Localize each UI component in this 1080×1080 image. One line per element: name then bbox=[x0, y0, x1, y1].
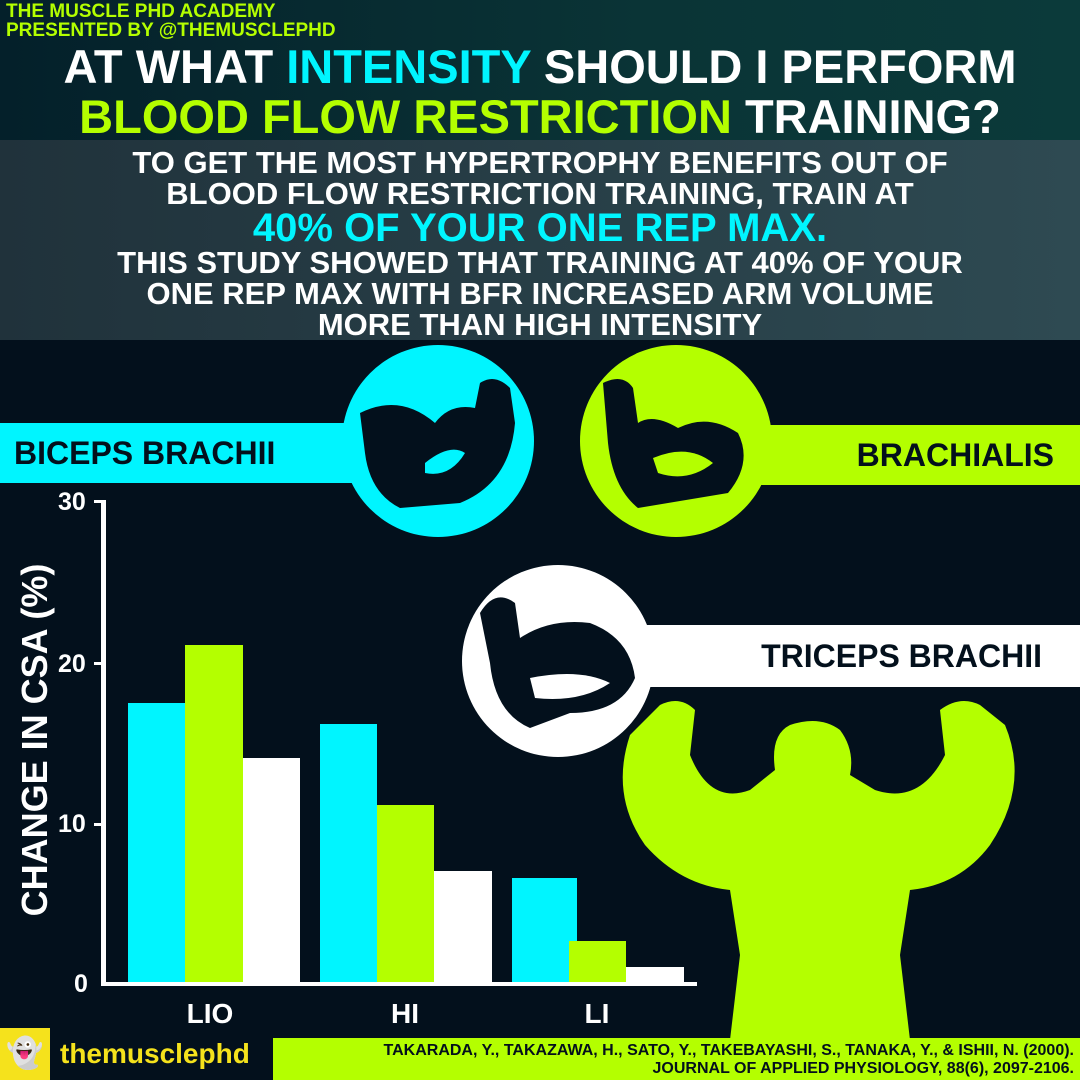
summary panel bbox=[0, 140, 1080, 340]
bar chart: LI bbox=[585, 998, 609, 1029]
summary panel: MORE THAN HIGH INTENSITY bbox=[318, 307, 762, 342]
summary panel: 40% OF YOUR ONE REP MAX. bbox=[253, 206, 827, 250]
summary panel: BLOOD FLOW RESTRICTION TRAINING, TRAIN AT bbox=[166, 176, 914, 211]
label: brachialis bbox=[700, 425, 1080, 485]
bars HI bbox=[320, 724, 377, 982]
snapchat handle bbox=[0, 1028, 250, 1080]
bars LIO bbox=[128, 703, 185, 982]
y axis title: CHANGE IN CSA (%) bbox=[14, 564, 55, 916]
title bbox=[63, 40, 1017, 143]
label: triceps brachii: TRICEPS BRACHII bbox=[761, 638, 1042, 674]
summary panel: THIS STUDY SHOWED THAT TRAINING AT 40% OF YOUR bbox=[117, 245, 963, 280]
title: BLOOD FLOW RESTRICTION TRAINING? bbox=[79, 90, 1001, 143]
header background bbox=[0, 0, 1080, 140]
snapchat handle: themusclephd bbox=[60, 1038, 250, 1069]
bar chart: 20 bbox=[58, 650, 86, 678]
icon: snapchat ghost: 👻 bbox=[6, 1037, 44, 1070]
bar chart: 10 bbox=[58, 810, 86, 838]
label: biceps brachii: BICEPS BRACHII bbox=[14, 435, 275, 471]
title: AT WHAT INTENSITY SHOULD I PERFORM bbox=[63, 40, 1017, 93]
label: triceps brachii bbox=[640, 625, 1080, 687]
icon: bodybuilder silhouette bbox=[622, 701, 1015, 1038]
bar chart bbox=[14, 488, 697, 1029]
x labels: LIO bbox=[187, 998, 233, 1029]
brand text: PRESENTED BY @THEMUSCLEPHD bbox=[6, 20, 336, 41]
citation bbox=[273, 1038, 1080, 1080]
brand text bbox=[6, 1, 336, 41]
bar chart: HI bbox=[391, 998, 419, 1029]
citation: JOURNAL OF APPLIED PHYSIOLOGY, 88(6), 2097-2106. bbox=[653, 1060, 1074, 1077]
brand text: THE MUSCLE PHD ACADEMY bbox=[6, 1, 276, 22]
label: biceps brachii bbox=[0, 423, 370, 483]
y tick labels: 30 bbox=[58, 488, 86, 516]
icon: triceps arm bbox=[462, 565, 650, 757]
axes bbox=[101, 500, 106, 986]
icon: snapchat ghost bbox=[0, 1028, 50, 1080]
icon: brachialis arm bbox=[580, 345, 771, 537]
summary panel: TO GET THE MOST HYPERTROPHY BENEFITS OUT OF bbox=[132, 145, 948, 180]
bar chart: 0 bbox=[74, 970, 88, 998]
icon: biceps arm bbox=[344, 345, 534, 537]
bars LI bbox=[512, 878, 577, 982]
summary panel: ONE REP MAX WITH BFR INCREASED ARM VOLUME bbox=[146, 276, 934, 311]
label: brachialis: BRACHIALIS bbox=[857, 437, 1054, 473]
citation: TAKARADA, Y., TAKAZAWA, H., SATO, Y., TAKEBAYASHI, S., TANAKA, Y., & ISHII, N. (2000). bbox=[384, 1042, 1074, 1059]
